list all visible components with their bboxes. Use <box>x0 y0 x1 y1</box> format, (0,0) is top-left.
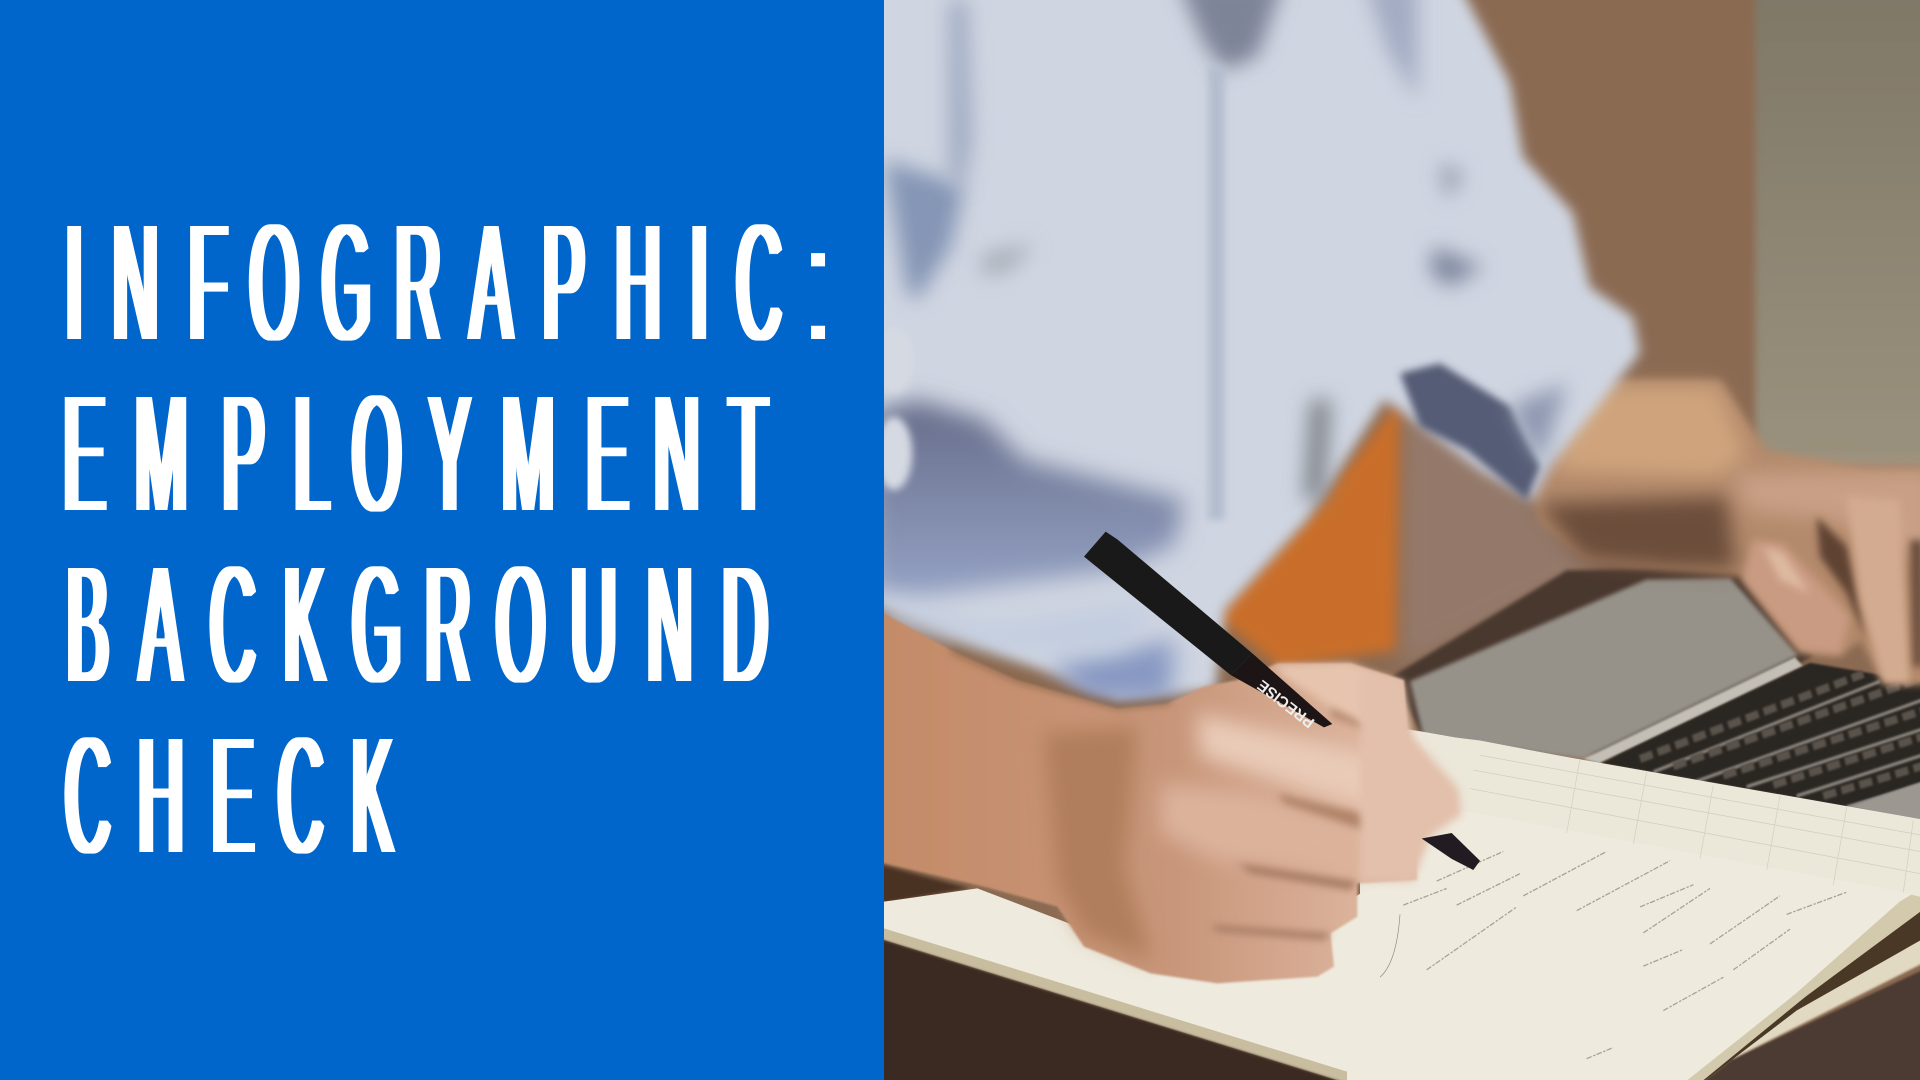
sleeve cuff folds <box>1400 163 1567 500</box>
title <box>64 188 827 891</box>
panel: blue title background <box>0 0 884 1080</box>
pen label: PRECISE <box>1254 676 1318 731</box>
shirt shadow under chest <box>870 400 1184 597</box>
title: CHECK <box>65 701 394 891</box>
laptop <box>1390 567 1920 826</box>
handwriting on the page <box>1380 851 1847 1059</box>
table, notebook left edge, writing hand and pen <box>877 532 1417 1080</box>
forearm and hand <box>877 610 1417 983</box>
table and notebook on the right <box>1360 722 1920 1080</box>
background wall <box>884 0 1920 1080</box>
right arm and hand <box>1533 380 1920 687</box>
photo: man writing in a notebook beside a laptop <box>860 0 1920 1080</box>
index finger and pen tip <box>1360 674 1480 881</box>
title: BACKGROUND <box>67 530 768 720</box>
pen <box>1084 532 1332 731</box>
shirt <box>860 0 1640 700</box>
title: INFOGRAPHIC: <box>65 188 827 378</box>
title: EMPLOYMENT <box>64 359 767 549</box>
